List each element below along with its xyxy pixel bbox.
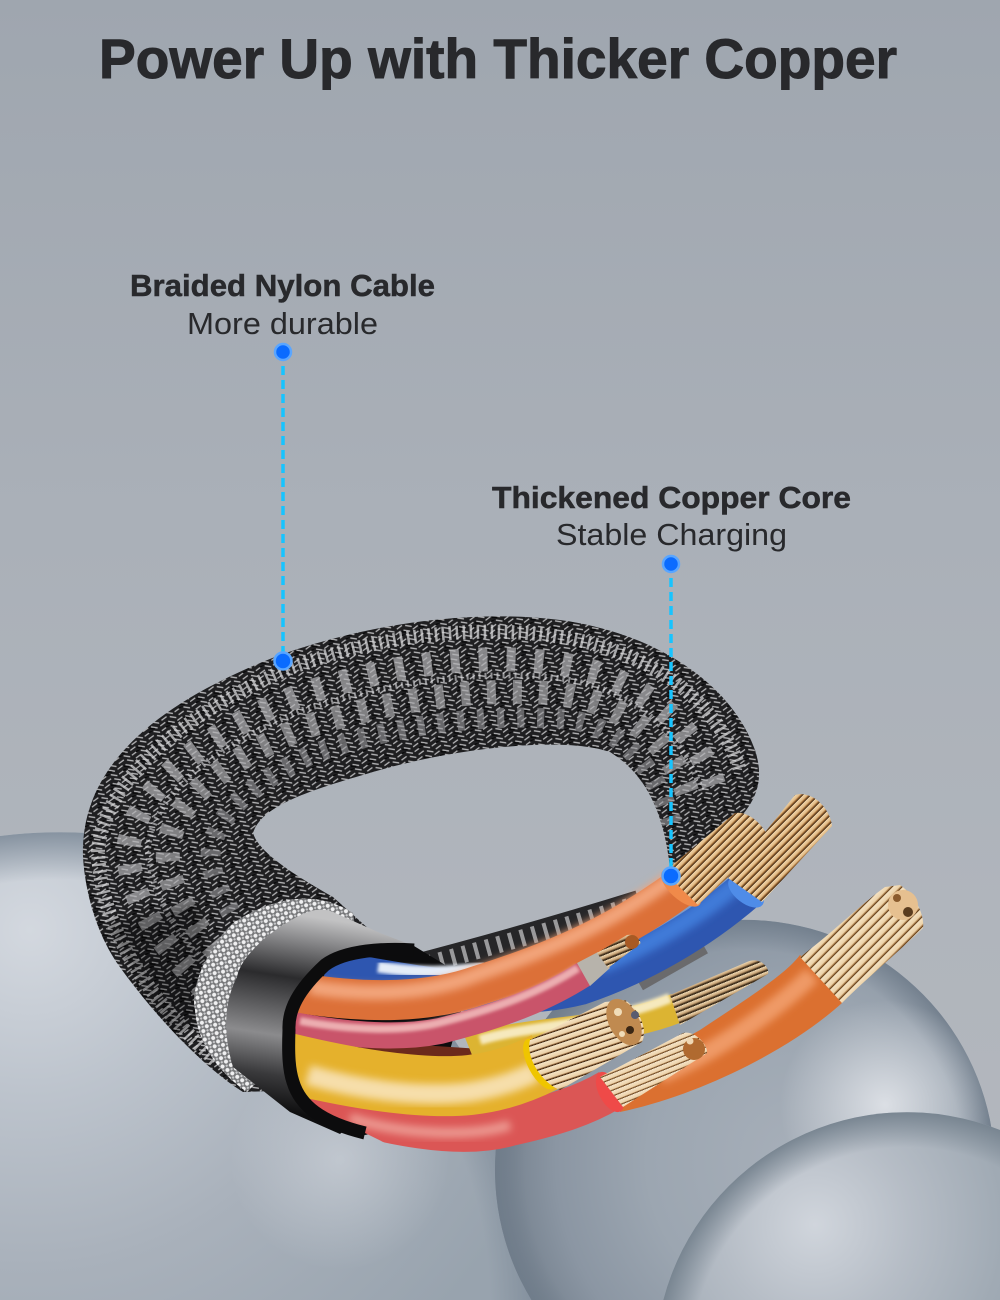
callout: braided nylon cable: More durable (187, 306, 378, 341)
wire: upper orange copper strands (661, 812, 766, 907)
cable: sleeve rim (289, 949, 414, 1133)
wire: bottom red (300, 1090, 610, 1133)
cable: knurled metal collar (194, 899, 360, 1092)
wires bundle (288, 794, 923, 1133)
wire: brown inner (360, 1050, 480, 1058)
wire: back yellow (470, 998, 677, 1050)
wire: small red silver tip (577, 935, 640, 986)
wire: small red (288, 968, 584, 1035)
cable: black sleeve (226, 910, 414, 1134)
wire: upper orange (298, 878, 680, 1000)
cable: sleeve opening (283, 946, 470, 1135)
callout: thickened copper core (492, 480, 851, 552)
callout: thickened copper core: Thickened Copper Core (492, 480, 851, 515)
wire: blue copper strands (723, 794, 832, 914)
wire: large yellow copper strands (523, 998, 644, 1090)
wire: back yellow copper strands (670, 960, 768, 1025)
callout: braided nylon cable (130, 268, 435, 341)
wire: lower orange (620, 955, 842, 1112)
callout: braided nylon cable: Braided Nylon Cable (130, 268, 435, 303)
wire: bottom red copper strands (590, 1033, 707, 1117)
wire: large yellow (288, 1062, 545, 1094)
callout: thickened copper core: Stable Charging (556, 517, 787, 552)
wire: blue (325, 885, 746, 993)
marker: braided nylon leader (274, 344, 292, 670)
cable: braided ring (82, 616, 760, 1092)
marker: copper core leader (662, 556, 680, 884)
cable: lower braided return (405, 903, 705, 985)
wire: lower orange copper strands (800, 885, 923, 1003)
title: Power Up with Thicker Copper (99, 27, 897, 90)
sphere: back right (495, 920, 995, 1300)
sphere: front left (0, 832, 538, 1300)
sphere: front right (663, 1112, 1000, 1300)
